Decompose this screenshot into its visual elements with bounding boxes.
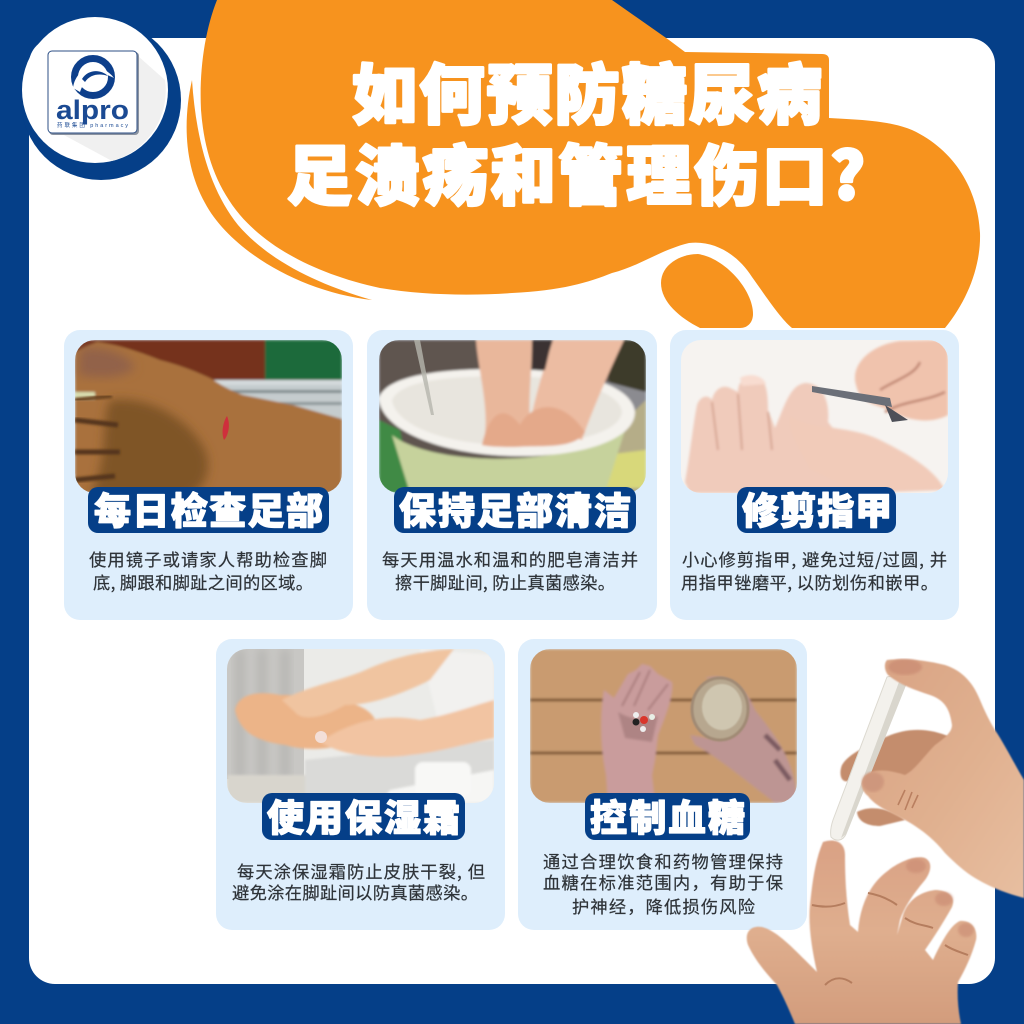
upper hand — [862, 659, 1024, 898]
body text — [382, 546, 638, 594]
photo: feet in basin — [379, 340, 646, 493]
photo: hands with pills and water — [530, 649, 797, 803]
title: 如何预防糖尿病 — [352, 43, 822, 137]
title — [287, 43, 865, 218]
panel: trim nails — [670, 330, 959, 620]
panel: check feet daily — [64, 330, 353, 620]
panel: control blood sugar — [518, 639, 807, 930]
photo: applying cream to foot — [227, 649, 494, 803]
body text: 通过合理饮食和药物管理保持 — [543, 848, 783, 873]
lancet pen — [831, 676, 906, 840]
body text: 擦干脚趾间, 防止真菌感染。 — [395, 569, 615, 594]
pills — [632, 712, 655, 732]
back fingers of upper hand — [840, 730, 950, 826]
photo: trimming toenails — [681, 340, 948, 493]
glass of water — [692, 678, 748, 740]
body text: 用指甲锉磨平, 以防划伤和嵌甲。 — [681, 569, 938, 594]
title crescent — [187, 80, 372, 300]
cream dab — [315, 731, 327, 743]
body text: 每天涂保湿霜防止皮肤干裂, 但 — [237, 858, 485, 883]
heading: 控制血糖 — [590, 788, 745, 842]
heading: 使用保湿霜 — [267, 788, 460, 842]
title: 足溃疡和管理伤口? — [287, 124, 865, 218]
photo: hands using lancet pen — [747, 659, 1024, 1024]
panel: use moisturiser — [216, 639, 505, 930]
title small blob — [661, 254, 753, 328]
logo badge: alpro — [56, 95, 129, 125]
wound — [223, 416, 229, 440]
body text — [89, 546, 327, 594]
body text: 每天用温水和温和的肥皂清洁并 — [382, 546, 638, 571]
body text — [543, 848, 783, 918]
title blob — [187, 0, 980, 328]
body text: 血糖在标准范围内，有助于保 — [543, 869, 783, 894]
body text — [232, 858, 485, 904]
heading: 保持足部清洁 — [399, 481, 631, 535]
heading: 每日检查足部 — [94, 481, 323, 535]
body text: 小心修剪指甲, 避免过短/过圆, 并 — [682, 546, 947, 571]
body text: 底, 脚跟和脚趾之间的区域。 — [93, 569, 313, 594]
nail clipper — [812, 386, 892, 407]
lower hand — [747, 841, 976, 1024]
water stream — [414, 340, 434, 415]
body text — [681, 546, 947, 594]
body text: 使用镜子或请家人帮助检查脚 — [89, 546, 327, 571]
logo badge — [21, 17, 181, 180]
body text: 护神经，降低损伤风险 — [572, 893, 755, 918]
logo badge: 药联集团 pharmacy — [57, 121, 128, 129]
photo: foot with wound — [75, 340, 342, 500]
body text: 避免涂在脚趾间以防真菌感染。 — [232, 879, 478, 904]
panel: keep feet clean — [367, 330, 657, 620]
heading: 修剪指甲 — [742, 481, 892, 535]
